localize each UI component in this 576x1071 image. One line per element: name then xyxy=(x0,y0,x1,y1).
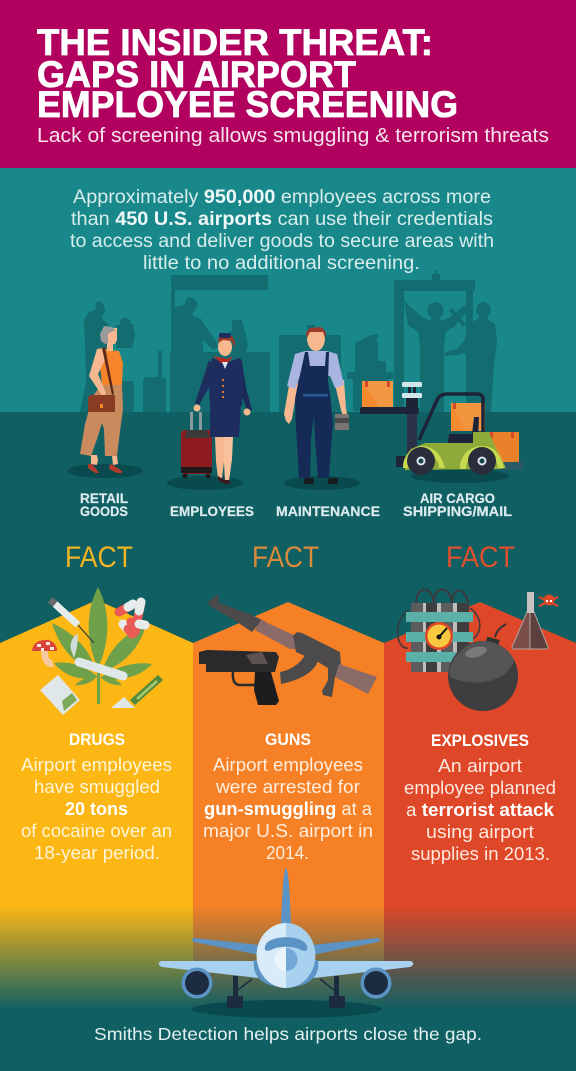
strap xyxy=(102,347,114,395)
title: GAPS IN AIRPORT xyxy=(37,54,356,95)
legs xyxy=(80,385,123,456)
category labels: RETAIL xyxy=(80,491,128,506)
panel text: explosives: supplies in 2013. xyxy=(411,844,550,864)
gauge xyxy=(425,622,453,650)
category labels: GOODS xyxy=(80,504,128,519)
figure: retail shopper xyxy=(67,326,143,478)
arm xyxy=(89,348,106,397)
legs xyxy=(215,437,224,478)
jacket and skirt xyxy=(209,358,243,408)
intro text xyxy=(70,187,494,274)
cannabis leaf xyxy=(52,587,152,704)
panel text: drugs: of cocaine over an xyxy=(21,821,172,841)
stabilizers xyxy=(192,938,260,955)
FACT headings: FACT xyxy=(446,541,515,574)
panel text: explosives: employee planned xyxy=(404,778,556,798)
silhouette: scanned person xyxy=(404,300,468,412)
figure: flight attendant xyxy=(167,333,252,490)
figure: maintenance worker xyxy=(284,327,360,490)
powder and tube xyxy=(111,697,135,708)
panel text: guns: were arrested for xyxy=(215,777,360,797)
arms xyxy=(284,380,298,424)
rifle magazine xyxy=(280,653,318,684)
seat xyxy=(448,417,479,443)
panel text: guns: 2014. xyxy=(266,843,309,863)
icon: guns xyxy=(199,594,377,705)
category labels: AIR CARGO xyxy=(420,491,495,506)
title: EMPLOYEE SCREENING xyxy=(37,84,458,125)
category labels xyxy=(80,491,512,519)
intro text: little to no additional screening. xyxy=(143,253,420,274)
rifle handguard xyxy=(255,620,303,649)
intro text: Approximately 950,000 employees across more xyxy=(73,187,491,208)
panel text: guns: major U.S. airport in xyxy=(203,821,373,841)
pills xyxy=(119,602,145,634)
flask xyxy=(512,612,530,649)
baggie xyxy=(40,675,80,715)
landing gear xyxy=(233,976,339,998)
dynamite sticks xyxy=(411,603,469,672)
bottom fade xyxy=(0,905,576,1010)
panel text: guns xyxy=(203,730,373,863)
silhouette: scanner arch xyxy=(394,270,475,412)
footer text: Smiths Detection helps airports close the gap. xyxy=(94,1024,482,1044)
category labels: SHIPPING/MAIL xyxy=(403,504,512,519)
panel: explosives xyxy=(384,602,576,1010)
title xyxy=(37,22,458,125)
panel text: explosives xyxy=(404,731,556,864)
panel text: explosives: EXPLOSIVES xyxy=(431,731,529,750)
teal background xyxy=(0,168,576,412)
intro text: to access and deliver goods to secure areas with xyxy=(70,231,494,252)
wheels xyxy=(407,447,435,475)
torso xyxy=(100,348,123,385)
mast and fork xyxy=(360,407,419,414)
silhouette: parcel at booth xyxy=(228,320,248,352)
background silhouettes xyxy=(80,270,497,412)
silhouette: booth xyxy=(170,275,270,412)
shirt xyxy=(287,351,344,389)
suitcase xyxy=(190,412,202,432)
nose xyxy=(274,948,286,971)
panel text: drugs: 20 tons xyxy=(65,799,128,819)
panel text: drugs: have smuggled xyxy=(34,777,160,797)
panel text: explosives: using airport xyxy=(426,822,534,842)
subtitle: Lack of screening allows smuggling & terrorism threats xyxy=(37,125,549,147)
forklift with cargo xyxy=(360,381,523,483)
panel text: drugs xyxy=(21,730,172,863)
panel text: drugs: DRUGS xyxy=(69,730,125,749)
scarf, face, hat xyxy=(213,356,233,366)
lift body xyxy=(404,432,506,470)
engines xyxy=(182,968,212,998)
panel text: guns: Airport employees xyxy=(213,755,363,775)
silhouette: booth agent xyxy=(171,297,218,400)
FACT headings: FACT xyxy=(65,541,133,574)
mushroom xyxy=(41,650,54,667)
rear crates xyxy=(451,403,485,431)
silhouette: shopping bag xyxy=(116,317,135,348)
silhouette: suitcase behind shopper xyxy=(118,381,134,412)
silhouette: security guard xyxy=(445,302,497,412)
FACT headings: FACT xyxy=(252,541,319,574)
icon: drugs xyxy=(32,587,163,715)
panel text: guns: GUNS xyxy=(265,730,311,749)
silhouette: suitcase xyxy=(143,351,166,412)
silhouette: wand xyxy=(449,308,466,327)
tail fin xyxy=(281,868,291,924)
joint xyxy=(79,662,123,676)
handbag xyxy=(88,395,115,412)
FACT headings xyxy=(65,541,515,574)
overalls xyxy=(295,352,333,478)
pistol xyxy=(199,650,279,672)
panel text: guns: gun-smuggling at a xyxy=(204,799,373,819)
toolbox xyxy=(335,414,349,430)
skull and crossbones xyxy=(539,597,558,606)
icon: explosives xyxy=(398,590,558,711)
wires xyxy=(416,590,468,604)
shoes xyxy=(304,478,314,484)
panel text: explosives: a terrorist attack xyxy=(406,800,555,820)
windshield xyxy=(265,937,307,951)
rifle receiver xyxy=(293,632,341,697)
rifle barrel xyxy=(208,594,266,632)
panel text: drugs: 18-year period. xyxy=(34,843,160,863)
category labels: EMPLOYEES xyxy=(170,504,254,519)
straps xyxy=(406,612,473,622)
arms xyxy=(195,360,214,405)
fuselage xyxy=(254,960,318,988)
panel text: explosives: An airport xyxy=(438,756,522,776)
intro text: than 450 U.S. airports can use their credentials xyxy=(71,209,493,230)
category labels: MAINTENANCE xyxy=(276,504,380,519)
raised crate xyxy=(362,381,393,407)
floor xyxy=(0,412,576,1071)
wings xyxy=(159,961,260,978)
header band xyxy=(0,0,576,168)
rifle stock xyxy=(335,664,377,694)
head xyxy=(107,328,117,351)
panel text: drugs: Airport employees xyxy=(21,755,172,775)
title: THE INSIDER THREAT: xyxy=(37,22,433,63)
silhouette: left shopper xyxy=(80,301,109,412)
panel: drugs xyxy=(0,600,193,1010)
bomb xyxy=(495,624,506,637)
overhead guard xyxy=(419,394,483,440)
silhouette: storage box xyxy=(279,335,341,412)
icon: airplane xyxy=(159,868,413,1018)
syringe xyxy=(55,604,78,625)
panel: guns xyxy=(193,602,384,1010)
silhouette: stacked luggage xyxy=(347,334,393,411)
head xyxy=(307,329,325,351)
